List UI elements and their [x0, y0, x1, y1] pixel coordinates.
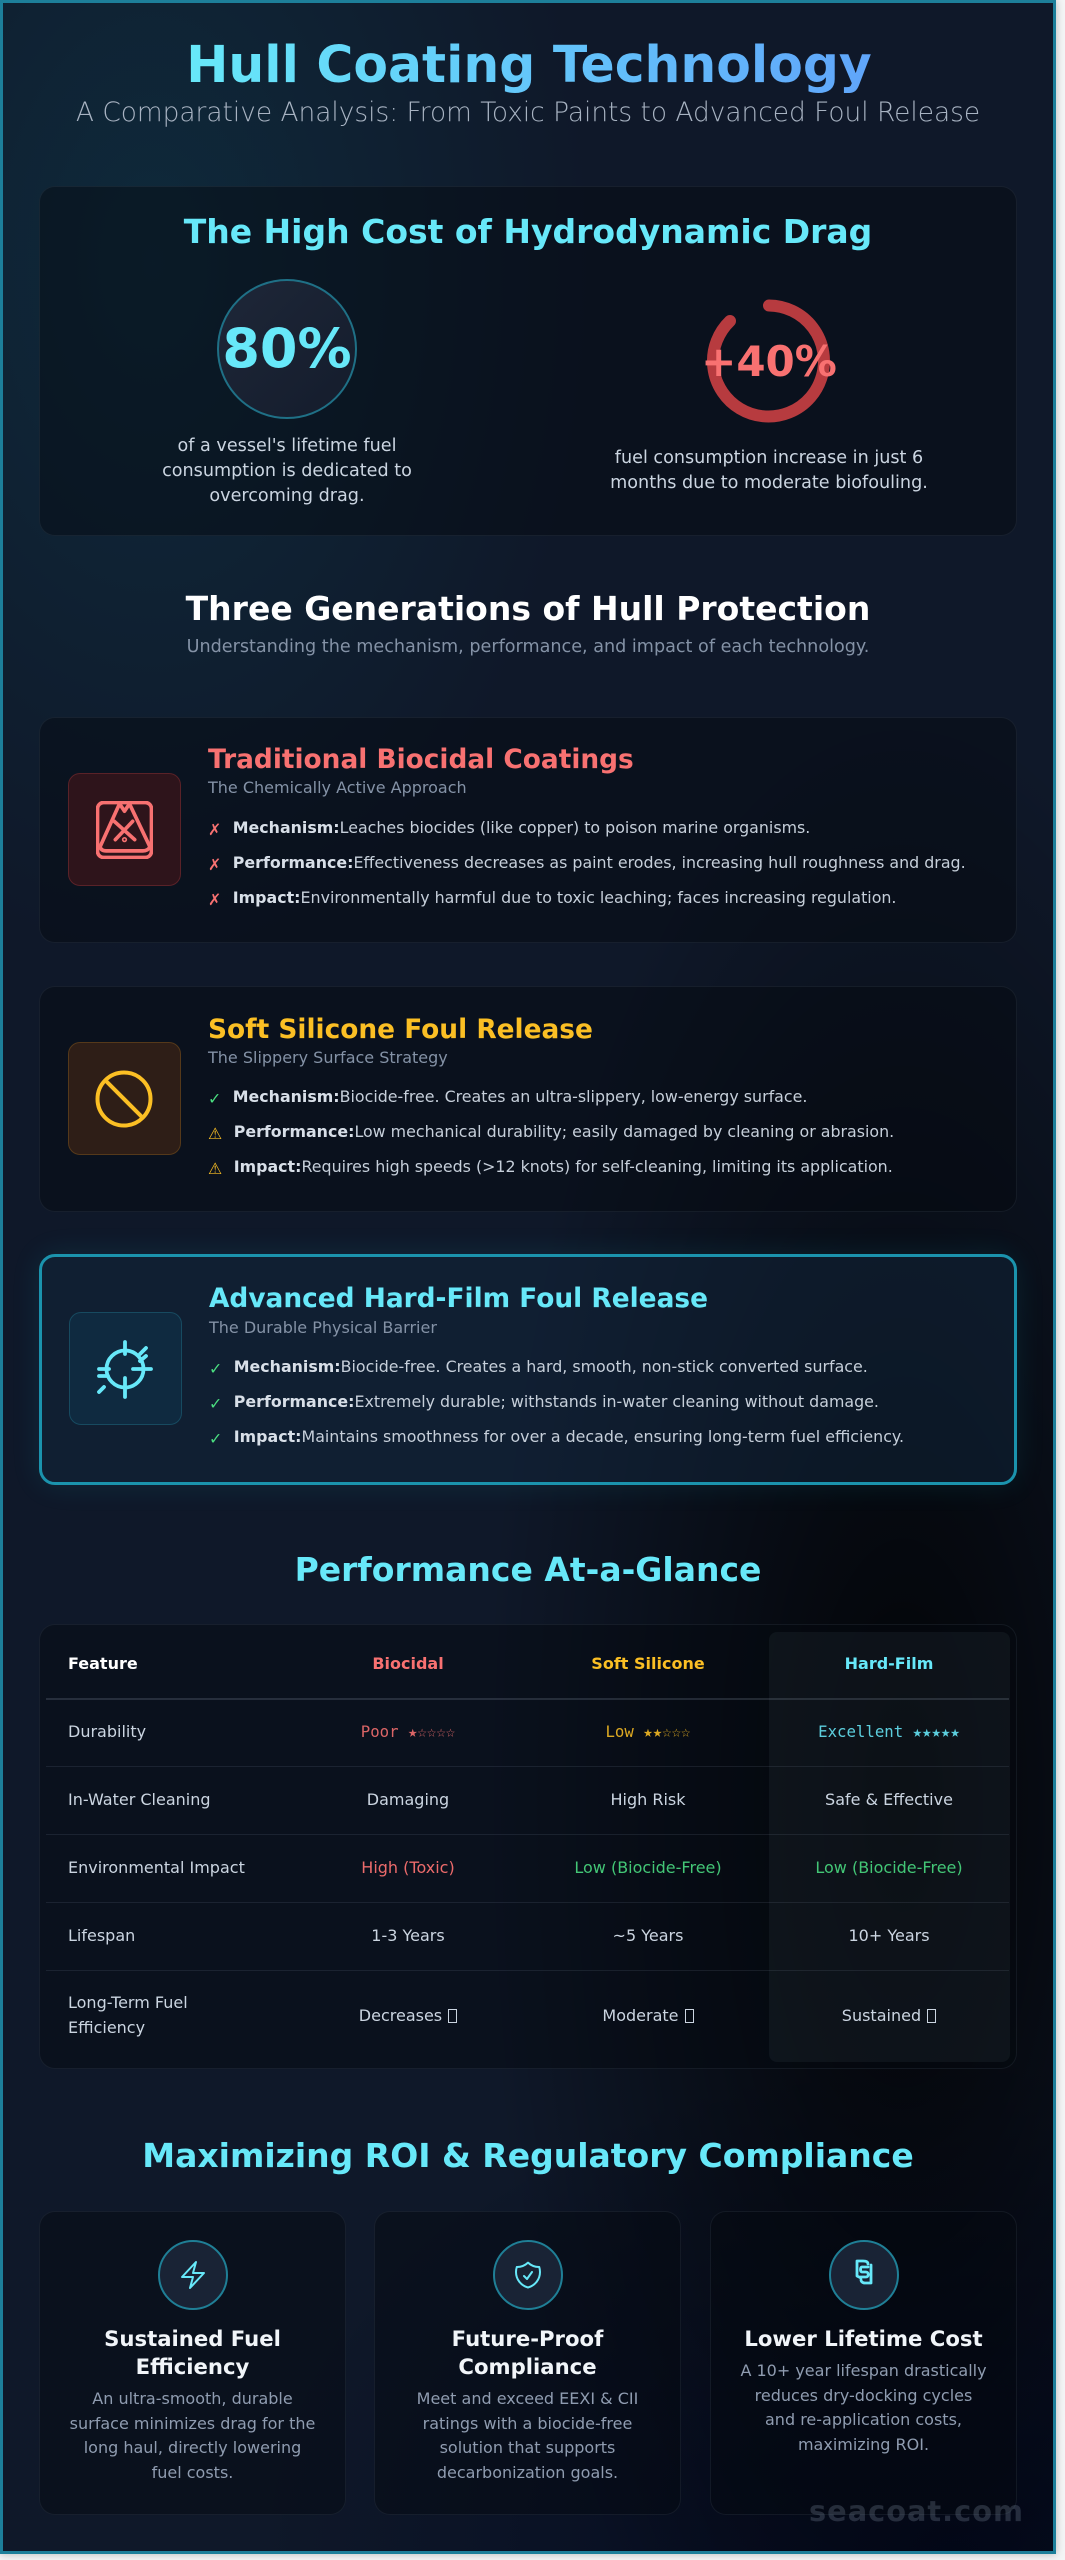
panel: future-proof compliance	[374, 2211, 681, 2515]
highlighted hard-film column	[769, 1632, 1010, 2062]
impact item: ✗	[208, 890, 221, 908]
benefit text: An ultra-smooth, durable	[92, 2389, 293, 2408]
performance item: ✓	[209, 1394, 222, 1412]
row durability: Durability	[68, 1722, 146, 1740]
stat text 80%: consumption is dedicated to	[162, 461, 412, 481]
row long-term fuel efficiency: Efficiency	[68, 2018, 145, 2037]
row durability: Excellent ★★★★★	[818, 1722, 960, 1740]
row durability: Low ★★☆☆☆	[605, 1722, 690, 1740]
row lifespan: 1-3 Years	[371, 1926, 445, 1944]
benefit text: fuel costs.	[152, 2463, 233, 2482]
benefit text: surface minimizes drag for the	[70, 2414, 315, 2433]
benefit text: maximizing ROI.	[798, 2435, 929, 2454]
drag heading: The High Cost of Hydrodynamic Drag	[184, 212, 872, 251]
row long-term fuel efficiency: Sustained	[842, 2006, 921, 2024]
stat value 80%: 80%	[222, 317, 352, 380]
stat circle 80%	[217, 279, 357, 419]
ring chart 40%	[707, 300, 830, 422]
header feature: Feature	[68, 1654, 138, 1672]
panel: lower lifetime cost	[710, 2211, 1017, 2515]
benefit text: Meet and exceed EEXI & CII	[417, 2389, 638, 2408]
icon: shield check	[493, 2240, 563, 2310]
generations subheading: Understanding the mechanism, performance, and impact of each technology.	[187, 637, 869, 657]
icon: bolt	[158, 2240, 228, 2310]
stat text +40%	[610, 448, 928, 493]
mechanism item: ✓	[209, 1358, 222, 1378]
performance item: Performance:Extremely durable; withstands in-water cleaning without damage.	[234, 1392, 879, 1410]
panel: traditional biocidal coatings	[39, 717, 1017, 943]
benefit text	[417, 2389, 638, 2482]
impact item: Impact:Maintains smoothness for over a decade, ensuring long-term fuel efficiency.	[234, 1426, 904, 1446]
performance heading: Performance At-a-Glance	[295, 1550, 761, 1589]
benefit text: ratings with a biocide-free	[423, 2414, 632, 2433]
card heading: Advanced Hard-Film Foul Release	[209, 1283, 708, 1314]
row in-water cleaning: In-Water Cleaning	[68, 1790, 211, 1808]
performance item: Performance:Effectiveness decreases as paint erodes, increasing hull roughness and drag.	[233, 852, 966, 872]
row environmental impact: Low (Biocide-Free)	[574, 1858, 722, 1876]
row in-water cleaning	[68, 1790, 953, 1808]
performance item: ⚠	[208, 1124, 222, 1142]
row durability	[68, 1722, 960, 1740]
row environmental impact: High (Toxic)	[361, 1858, 455, 1876]
row environmental impact: Low (Biocide-Free)	[815, 1858, 963, 1876]
benefit heading: Lower Lifetime Cost	[744, 2326, 983, 2351]
stat text +40%: months due to moderate biofouling.	[610, 473, 928, 493]
header biocidal: Biocidal	[372, 1654, 444, 1672]
row environmental impact	[68, 1858, 963, 1876]
row long-term fuel efficiency: Moderate	[602, 2006, 678, 2024]
mechanism item: ✗	[208, 820, 221, 838]
benefit text	[740, 2361, 987, 2454]
impact item: Impact:Environmentally harmful due to toxic leaching; faces increasing regulation.	[233, 888, 896, 906]
row durability: Poor ★☆☆☆☆	[361, 1722, 455, 1740]
benefit text: reduces dry-docking cycles	[755, 2386, 972, 2405]
row in-water cleaning: Safe & Effective	[825, 1790, 953, 1808]
title: Hull Coating Technology	[186, 35, 872, 94]
panel: sustained fuel efficiency	[39, 2211, 346, 2515]
header soft silicone: Soft Silicone	[591, 1654, 705, 1672]
row long-term fuel efficiency: Decreases	[359, 2006, 442, 2024]
icon: hard film target	[69, 1312, 182, 1425]
row lifespan: Lifespan	[68, 1926, 135, 1944]
ROI heading: Maximizing ROI & Regulatory Compliance	[142, 2136, 914, 2175]
card subheading: The Chemically Active Approach	[208, 778, 467, 797]
mechanism item: ✓	[208, 1088, 221, 1108]
row in-water cleaning: High Risk	[610, 1790, 686, 1808]
benefit heading: Efficiency	[136, 2354, 249, 2379]
benefit text: decarbonization goals.	[437, 2463, 618, 2482]
icon: prohibited	[68, 1042, 181, 1155]
benefit text: solution that supports	[440, 2438, 615, 2457]
header row	[68, 1654, 933, 1672]
performance item: Performance:Low mechanical durability; easily damaged by cleaning or abrasion.	[234, 1122, 894, 1140]
header hard-film: Hard-Film	[845, 1654, 933, 1672]
watermark: seacoat.com	[809, 2494, 1024, 2528]
stat text 80%: of a vessel's lifetime fuel	[178, 436, 396, 456]
benefit heading	[452, 2326, 604, 2379]
row in-water cleaning: Damaging	[367, 1790, 449, 1808]
icon: dollar	[829, 2240, 899, 2310]
row lifespan	[68, 1926, 930, 1944]
stat text 80%: overcoming drag.	[209, 486, 365, 506]
benefit heading: Future-Proof	[452, 2326, 603, 2351]
performance item: ✗	[208, 854, 221, 874]
row long-term fuel efficiency	[68, 1993, 936, 2037]
generations heading: Three Generations of Hull Protection	[186, 589, 870, 628]
benefit text: A 10+ year lifespan drastically	[740, 2361, 987, 2380]
row environmental impact: Environmental Impact	[68, 1858, 245, 1876]
benefit heading	[104, 2326, 281, 2379]
benefit text	[70, 2389, 315, 2482]
panel: soft silicone foul release	[39, 986, 1017, 1212]
card subheading: The Slippery Surface Strategy	[208, 1048, 448, 1066]
panel: the high cost of drag	[39, 186, 1017, 536]
table panel	[39, 1624, 1017, 2069]
row lifespan: 10+ Years	[848, 1926, 930, 1944]
mechanism item: Mechanism:Leaches biocides (like copper) to poison marine organisms.	[233, 818, 810, 836]
mechanism item: Mechanism:Biocide-free. Creates a hard, smooth, non-stick converted surface.	[234, 1356, 868, 1376]
panel: advanced hard-film foul release	[39, 1254, 1017, 1485]
impact item: ⚠	[208, 1158, 222, 1178]
card heading: Traditional Biocidal Coatings	[208, 744, 634, 775]
card subheading: The Durable Physical Barrier	[209, 1318, 437, 1336]
stat text +40%: fuel consumption increase in just 6	[615, 448, 923, 468]
impact item: Impact:Requires high speeds (>12 knots) for self-cleaning, limiting its application.	[234, 1156, 893, 1176]
stat text 80%	[162, 436, 412, 506]
card heading: Soft Silicone Foul Release	[208, 1014, 593, 1044]
mechanism item: Mechanism:Biocide-free. Creates an ultra-slippery, low-energy surface.	[233, 1086, 807, 1106]
icon: toxic hazard	[68, 773, 181, 886]
row lifespan: ~5 Years	[613, 1926, 683, 1944]
benefit heading: Compliance	[458, 2354, 597, 2379]
benefit text: and re-application costs,	[765, 2410, 962, 2429]
benefit text: long haul, directly lowering	[84, 2438, 301, 2457]
row long-term fuel efficiency: Long-Term Fuel	[68, 1993, 188, 2012]
subtitle: A Comparative Analysis: From Toxic Paints to Advanced Foul Release	[76, 97, 980, 128]
impact item: ✓	[209, 1428, 222, 1448]
benefit heading: Sustained Fuel	[104, 2326, 281, 2351]
stat value +40%: +40%	[701, 337, 837, 386]
